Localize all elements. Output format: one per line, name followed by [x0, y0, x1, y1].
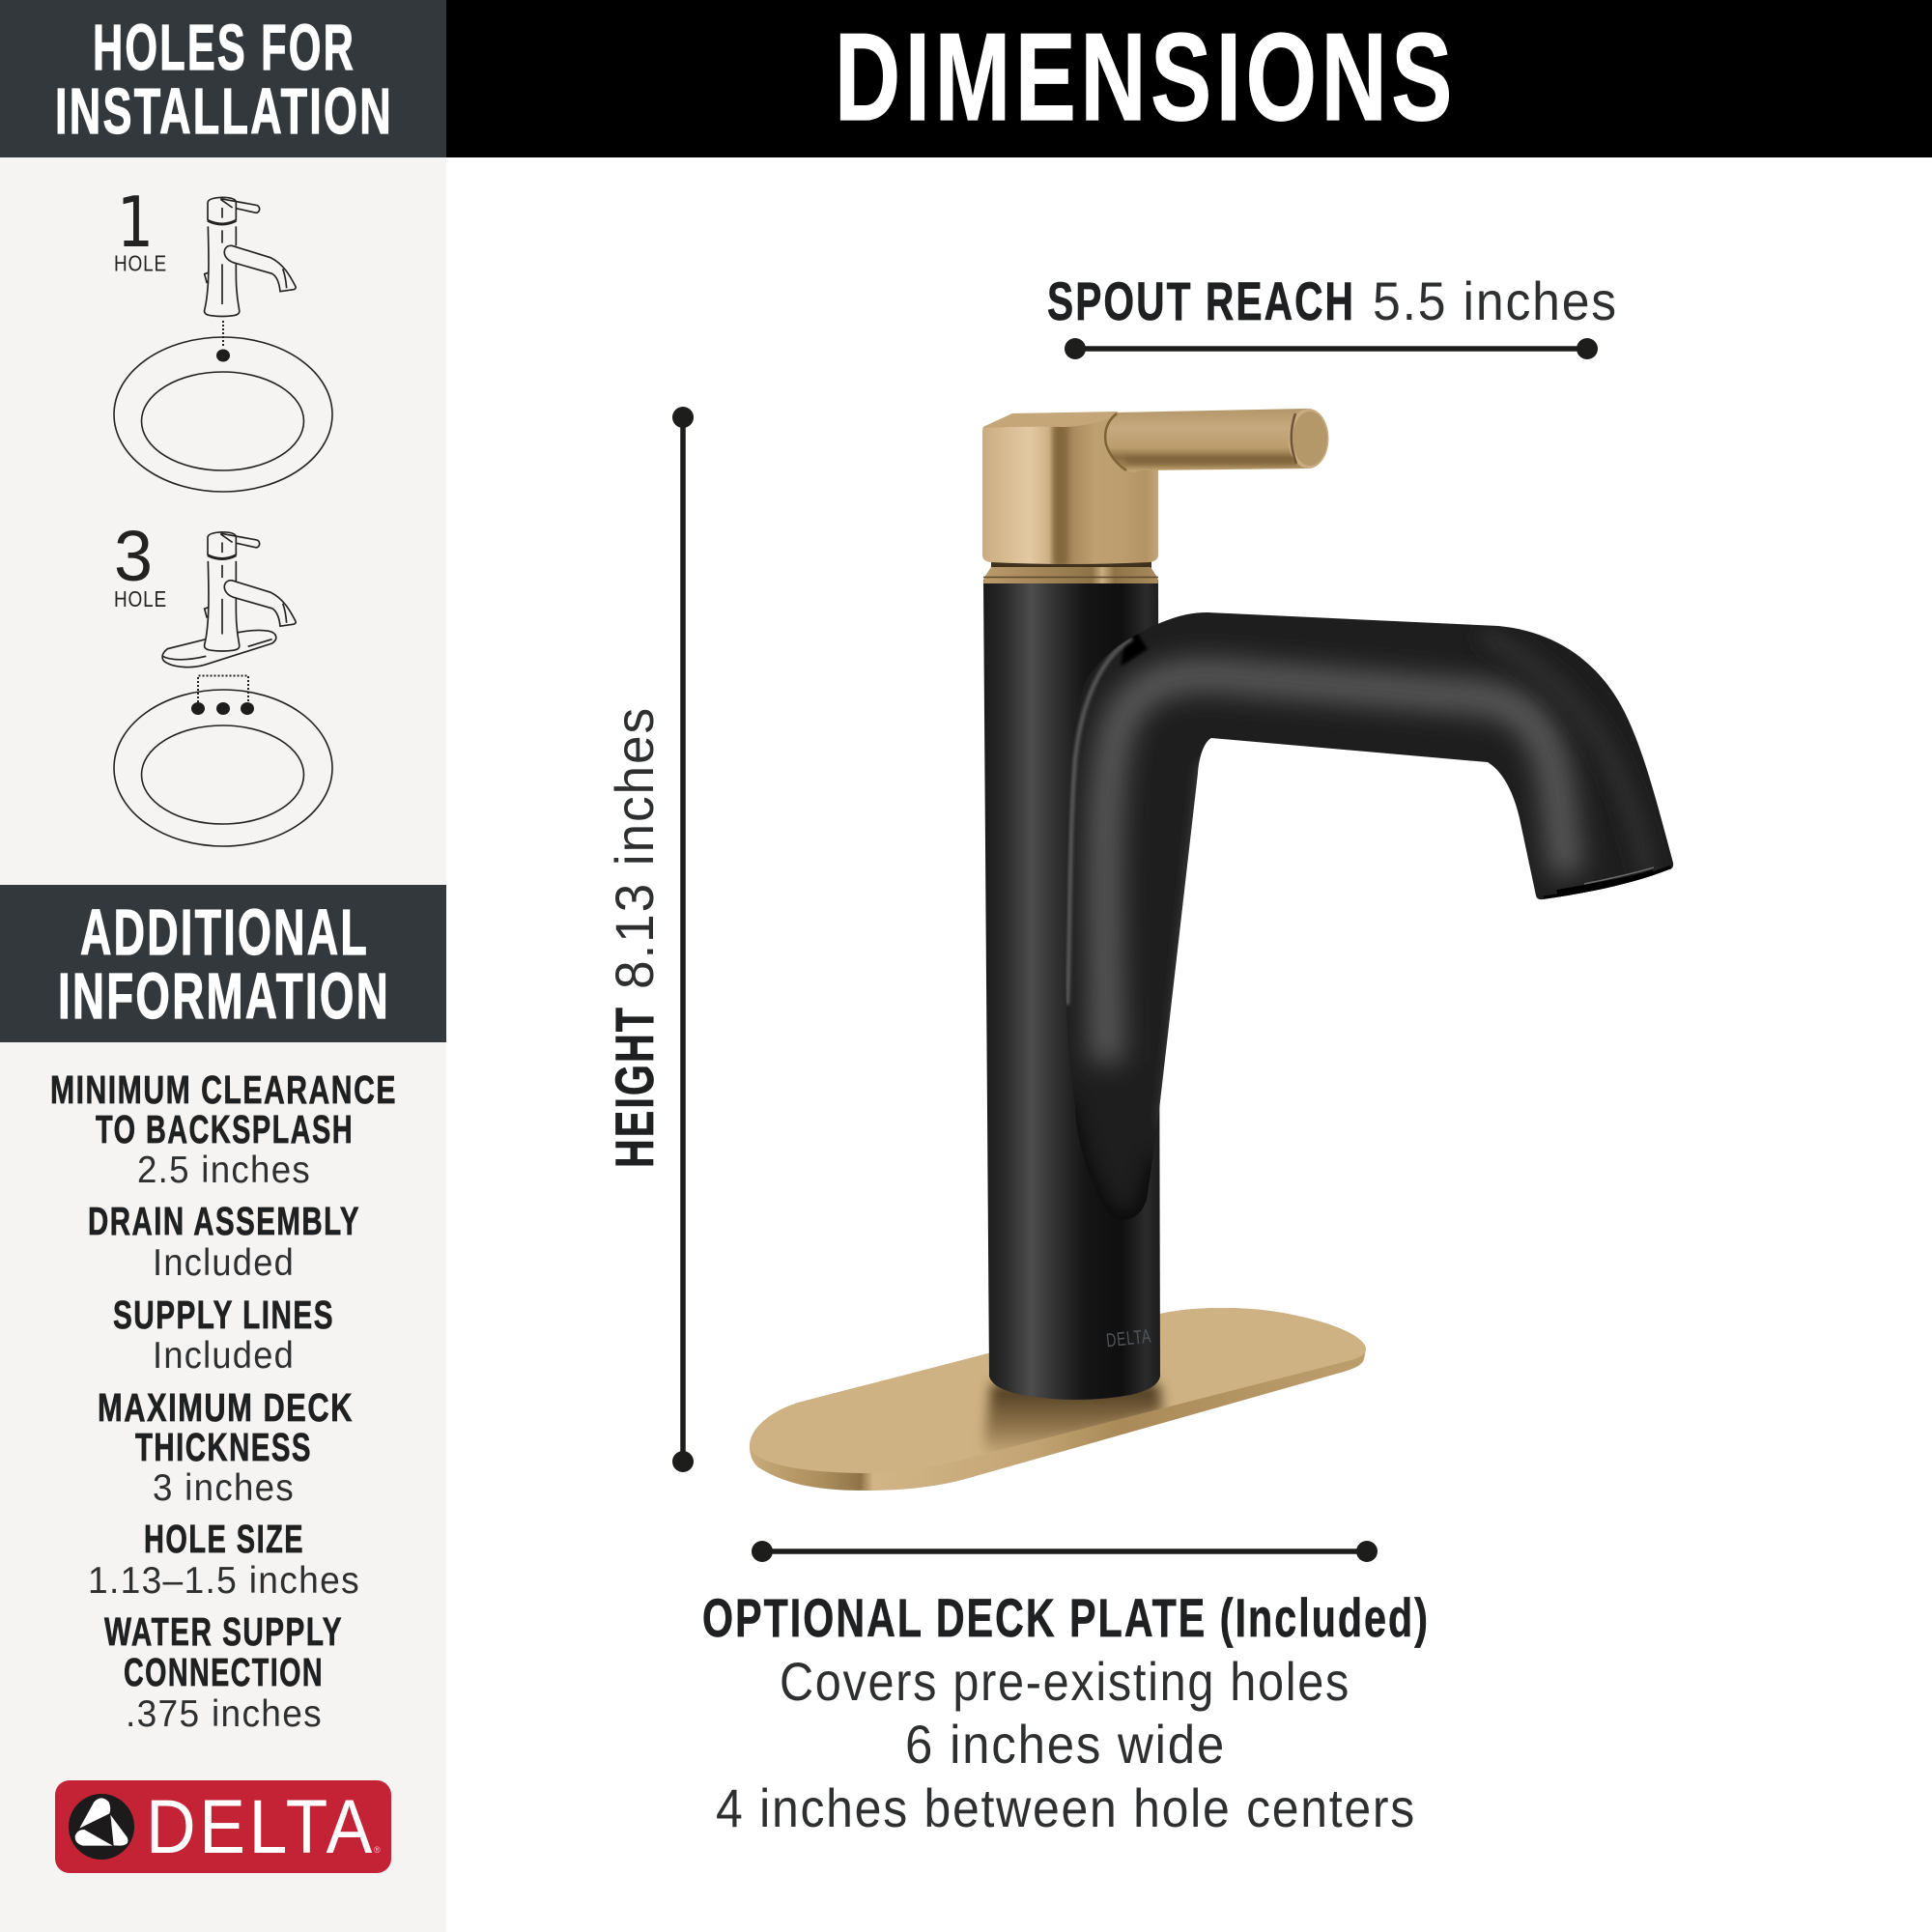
dimension: spout reach: 5.5 inches	[1373, 270, 1618, 331]
diagram: 1 hole installation: HOLE	[114, 251, 167, 276]
text block: optional deck plate: Covers pre-existing holes	[780, 1651, 1350, 1712]
dimension: height	[604, 407, 694, 1472]
text block: additional information list: CONNECTION	[124, 1650, 324, 1694]
background: sidebar	[0, 0, 446, 1932]
logo: Delta: ®	[374, 1845, 381, 1855]
text block: additional information list: SUPPLY LINES	[113, 1293, 334, 1337]
text block: additional information list	[50, 1067, 397, 1735]
text block: additional information list: THICKNESS	[135, 1425, 312, 1469]
logo: Delta: DELTA	[146, 1783, 376, 1869]
diagram: 1 hole installation	[114, 182, 332, 492]
spout	[1065, 612, 1673, 1219]
deck plate	[750, 1308, 1366, 1491]
dimension: height: 8.13 inches	[604, 706, 665, 989]
text block: additional information list: HOLE SIZE	[144, 1517, 304, 1561]
text block: additional information list: MAXIMUM DECK	[98, 1385, 354, 1430]
dimension: spout reach: SPOUT REACH	[1047, 270, 1355, 331]
text block: additional information list: 1.13–1.5 inches	[88, 1560, 360, 1602]
diagram: 3 hole installation: 3	[114, 516, 153, 596]
dimension: spout reach	[1047, 270, 1618, 359]
text block: additional information list: Included	[153, 1242, 295, 1284]
panel heading: additional information: INFORMATION	[58, 960, 390, 1033]
dimension: deck plate line	[752, 1541, 1378, 1562]
dimension: height: HEIGHT	[604, 1006, 665, 1168]
faucet body	[983, 580, 1160, 1400]
panel heading: holes for installation	[0, 0, 446, 157]
gold handle	[982, 409, 1329, 565]
logo: Delta	[55, 1780, 391, 1873]
panel heading: holes for installation: INSTALLATION	[55, 75, 393, 148]
diagram: 3 hole installation	[114, 516, 332, 846]
text block: additional information list: 3 inches	[153, 1467, 295, 1509]
text block: additional information list: Included	[153, 1335, 295, 1377]
text block: optional deck plate: 6 inches wide	[905, 1714, 1226, 1775]
text block: additional information list: TO BACKSPLASH	[96, 1107, 354, 1151]
diagram: 1 hole installation: 1	[117, 182, 154, 263]
text block: additional information list: DRAIN ASSEMBLY	[88, 1199, 360, 1243]
text block: additional information list: MINIMUM CLEARANCE	[50, 1067, 397, 1112]
text block: additional information list: 2.5 inches	[137, 1150, 311, 1191]
title banner	[446, 0, 1932, 157]
text block: optional deck plate: OPTIONAL DECK PLATE (Included)	[702, 1587, 1430, 1648]
title: DIMENSIONS	[835, 8, 1457, 147]
panel heading: holes for installation: HOLES FOR	[93, 12, 355, 84]
panel heading: additional information	[0, 885, 446, 1042]
text block: additional information list: .375 inches	[126, 1693, 323, 1735]
text block: optional deck plate: 4 inches between hole centers	[716, 1777, 1416, 1838]
diagram: 3 hole installation: HOLE	[114, 586, 167, 611]
text block: additional information list: WATER SUPPLY	[104, 1609, 343, 1654]
panel heading: additional information: ADDITIONAL	[80, 896, 369, 969]
gold collar ring	[983, 560, 1158, 583]
text block: optional deck plate	[702, 1587, 1430, 1838]
body engraving: DELTA	[1105, 1326, 1152, 1351]
faucet illustration	[750, 409, 1690, 1491]
